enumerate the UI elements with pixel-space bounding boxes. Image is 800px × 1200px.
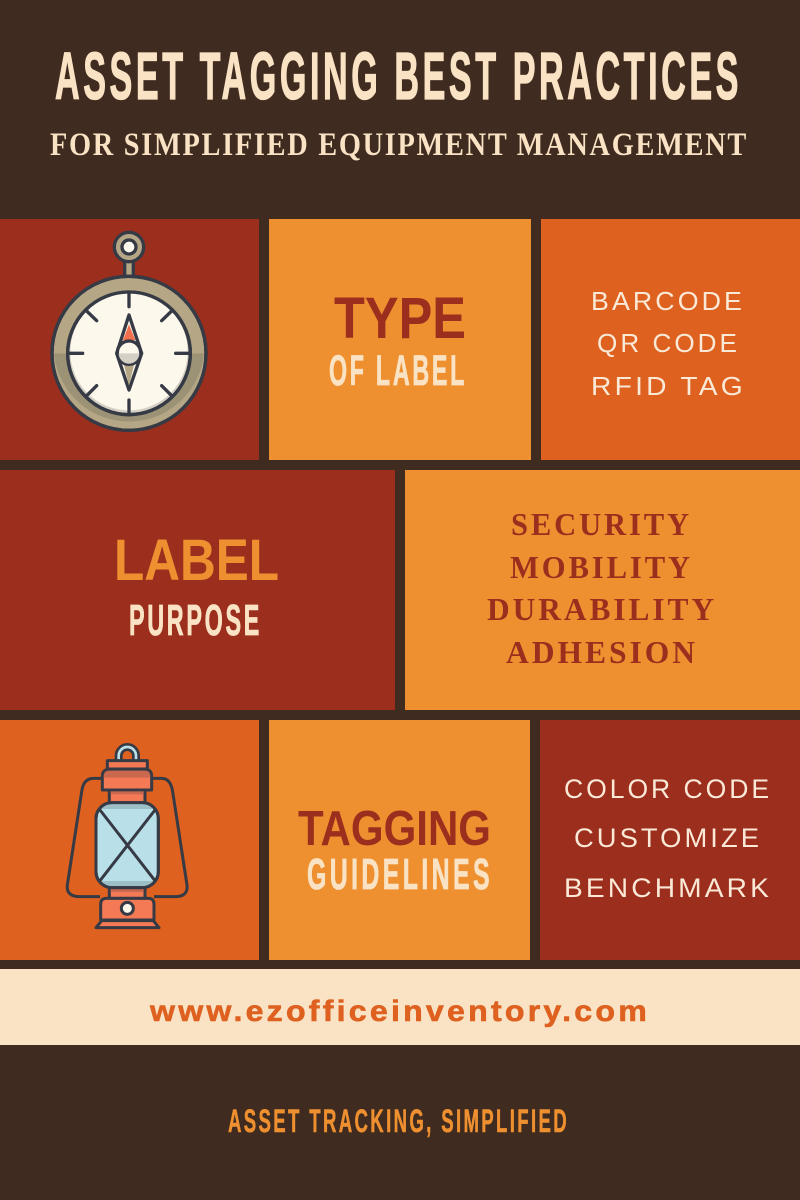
- subheading: guidelines: GUIDELINES: [307, 850, 493, 899]
- website banner: [0, 969, 800, 1045]
- panel: tagging guidelines: [269, 720, 530, 960]
- list item: adhesion: ADHESION: [506, 634, 698, 670]
- list item: security: SECURITY: [511, 506, 692, 542]
- icon: lantern: [67, 747, 187, 928]
- tagline: ASSET TRACKING, SIMPLIFIED: [228, 1103, 569, 1139]
- heading: tagging: TAGGING: [298, 802, 491, 856]
- list item: customize: CUSTOMIZE: [574, 823, 762, 853]
- list item: durability: DURABILITY: [487, 591, 717, 627]
- panel: type of label: [269, 219, 531, 460]
- heading: type: TYPE: [334, 286, 466, 351]
- panel: compass: [0, 219, 259, 460]
- icon: compass: [52, 232, 206, 430]
- list item: mobility: MOBILITY: [510, 549, 693, 585]
- panel: lantern: [0, 720, 259, 960]
- list item: rfid tag: RFID TAG: [591, 371, 746, 401]
- panel: label types list: [541, 219, 800, 460]
- subheading: of label: OF LABEL: [329, 347, 467, 395]
- subheading: purpose: PURPOSE: [129, 596, 262, 645]
- panel: purpose list: [405, 470, 800, 710]
- panel: guidelines list: [540, 720, 800, 960]
- list item: barcode: BARCODE: [591, 286, 745, 316]
- website url: www.ezofficeinventory.com: [149, 995, 650, 1028]
- list item: benchmark: BENCHMARK: [564, 873, 772, 903]
- list item: color code: COLOR CODE: [564, 774, 772, 804]
- panel: label purpose: [0, 470, 395, 710]
- list item: qr code: QR CODE: [597, 328, 740, 358]
- heading: label: LABEL: [114, 528, 279, 593]
